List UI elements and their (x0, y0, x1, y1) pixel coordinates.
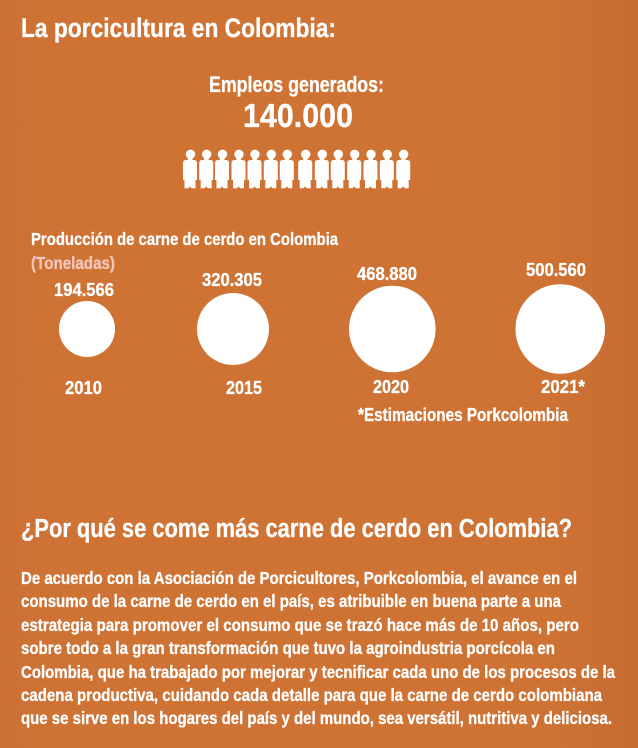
bubble 2020: 2020 (373, 377, 409, 397)
bubble 2010: 2010 (65, 378, 102, 398)
body paragraph: consumo de la carne de cerdo en el país, es atribuible en buena parte a una (21, 591, 561, 611)
title: La porcicultura en Colombia: (21, 13, 336, 43)
body paragraph: sobre todo a la gran transformación que tuvo la agroindustria porcícola en (21, 638, 555, 658)
bubble 2021: 500.560 (526, 260, 586, 280)
icon: row of people (183, 150, 410, 188)
bubble 2015: 2015 (226, 378, 262, 398)
bubble 2021: 2021* (541, 377, 585, 397)
panel: jobs generated (183, 72, 410, 188)
bubble 2021 (516, 260, 605, 397)
footnote: *Estimaciones Porkcolombia (358, 405, 569, 425)
panel: pork production chart (31, 229, 605, 425)
bubble 2020 (349, 264, 436, 397)
chart unit: (Toneladas) (31, 253, 115, 273)
bubble 2020: 468.880 (357, 264, 417, 284)
chart heading: Producción de carne de cerdo en Colombia (31, 229, 338, 249)
bubble 2015: 320.305 (202, 270, 262, 290)
bubble 2010: 194.566 (54, 280, 114, 300)
bubble 2015 (197, 270, 269, 398)
body paragraph (21, 568, 615, 728)
bubble 2010 (54, 280, 115, 398)
jobs number: 140.000 (243, 97, 353, 134)
jobs heading: Empleos generados: (209, 72, 384, 97)
